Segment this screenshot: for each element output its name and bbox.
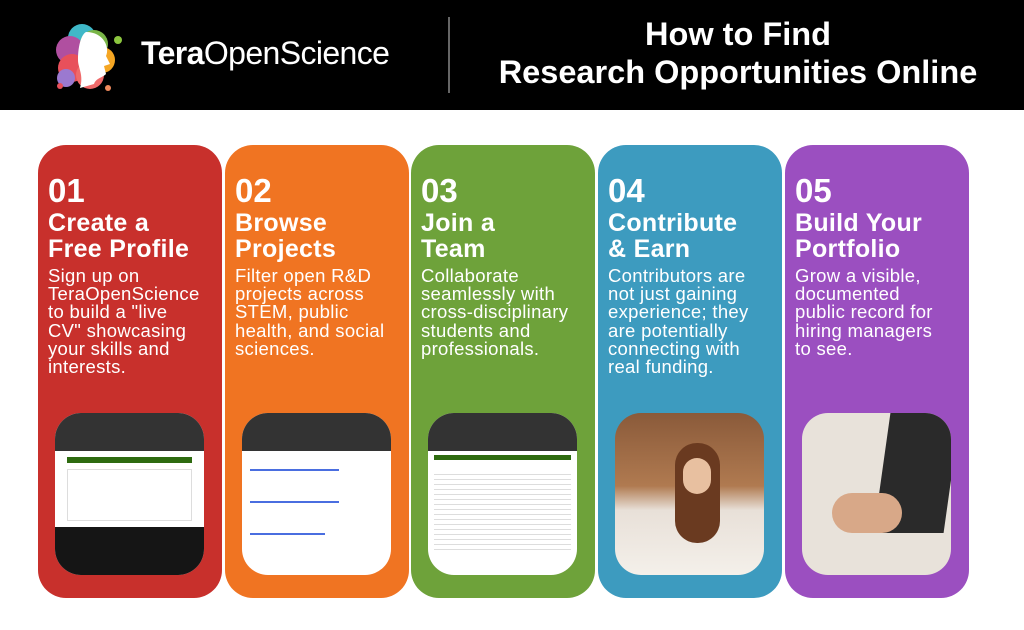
logo icon xyxy=(56,24,122,91)
panel: step 4: Contribute xyxy=(608,209,737,237)
panel: step 5: public record for xyxy=(795,301,933,322)
panel: step 5: Portfolio xyxy=(795,235,900,263)
panel: step 3: cross-disciplinary xyxy=(421,301,568,322)
header bar xyxy=(0,0,1024,110)
panel: step 1: interests. xyxy=(48,356,126,377)
panel: step 4 xyxy=(598,145,782,598)
panel: step 1: CV" showcasing xyxy=(48,320,186,341)
panel: step 4: 04 xyxy=(608,172,645,209)
divider xyxy=(448,17,450,93)
panel: step 2 xyxy=(225,145,409,598)
panel: step 1: Free Profile xyxy=(48,235,189,263)
image: woman studying xyxy=(615,413,764,575)
panel: step 1: your skills and xyxy=(48,338,170,359)
panel: step 2: sciences. xyxy=(235,338,315,359)
panel: step 2: 02 xyxy=(235,172,272,209)
panel: step 2: health, and social xyxy=(235,320,384,341)
panel: step 4: not just gaining xyxy=(608,283,737,304)
panel: step 4: Contributors are xyxy=(608,265,745,286)
image: project list screenshot xyxy=(242,413,391,575)
panel: step 3: Team xyxy=(421,235,486,263)
panel: step 4: real funding. xyxy=(608,356,714,377)
image: project page screenshot xyxy=(428,413,577,575)
panel: step 5: Grow a visible, xyxy=(795,265,921,286)
panel: step 2: Projects xyxy=(235,235,336,263)
panel: step 4: connecting with xyxy=(608,338,740,359)
panel: step 1: Sign up on xyxy=(48,265,139,286)
panel: step 2: projects across xyxy=(235,283,364,304)
panel: step 1: 01 xyxy=(48,172,85,209)
panel: step 3: 03 xyxy=(421,172,458,209)
brand name: TeraOpenScience xyxy=(141,35,389,71)
panel: step 5: 05 xyxy=(795,172,832,209)
title: Research Opportunities Online xyxy=(499,54,977,90)
panel: step 1 xyxy=(38,145,222,598)
panel: step 4: experience; they xyxy=(608,301,749,322)
panel: step 2: Browse xyxy=(235,209,327,237)
panel: step 5: documented xyxy=(795,283,900,304)
panel: step 4: are potentially xyxy=(608,320,728,341)
panel: step 3 xyxy=(411,145,595,598)
panel: step 2: Filter open R&D xyxy=(235,265,371,286)
panel: step 3: seamlessly with xyxy=(421,283,555,304)
panel: step 1: TeraOpenScience xyxy=(48,283,200,304)
panel: step 3: professionals. xyxy=(421,338,539,359)
image: laptop typing xyxy=(802,413,951,575)
panel: step 5: to see. xyxy=(795,338,853,359)
panel: step 4: & Earn xyxy=(608,235,690,263)
title: How to Find xyxy=(645,16,831,52)
panel: step 3: students and xyxy=(421,320,531,341)
panel: step 5: Build Your xyxy=(795,209,922,237)
title xyxy=(499,16,977,90)
panel: step 3: Collaborate xyxy=(421,265,519,286)
panel: step 5: hiring managers xyxy=(795,320,932,341)
panel: step 2: STEM, public xyxy=(235,301,349,322)
panel: step 1: to build a "live xyxy=(48,301,167,322)
panel: step 3: Join a xyxy=(421,209,495,237)
panel: step 1: Create a xyxy=(48,209,149,237)
image: registration screenshot xyxy=(55,413,204,575)
panel: step 5 xyxy=(785,145,969,598)
